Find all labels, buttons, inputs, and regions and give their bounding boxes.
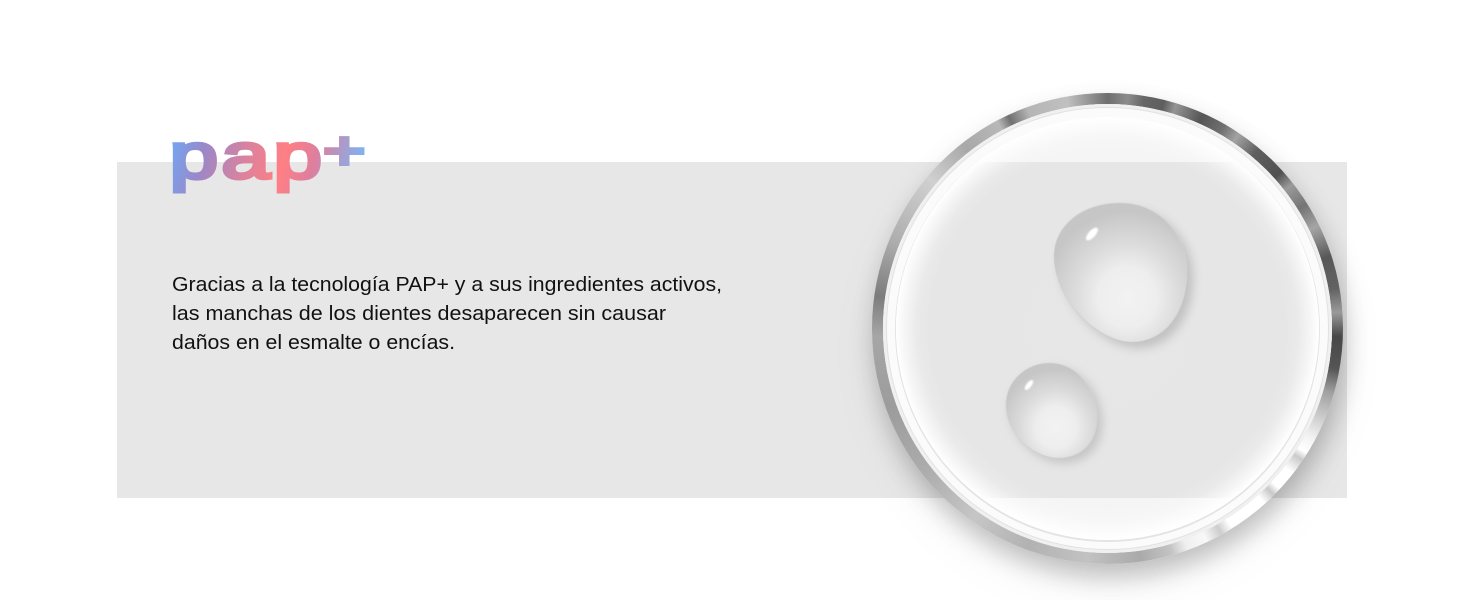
- panel: grey background band: [117, 162, 1347, 498]
- dish metallic rim: [872, 93, 1343, 564]
- dish inner well: [896, 117, 1319, 540]
- small drop: [1006, 363, 1102, 463]
- dish glass lip: [883, 104, 1332, 553]
- petri dish: [872, 93, 1343, 564]
- large drop: [1054, 203, 1193, 348]
- logo: pap+: pap: [170, 121, 322, 192]
- text block: description: [172, 274, 722, 354]
- water drops: [1006, 202, 1197, 466]
- text block: description: daños en el esmalte o encías.: [172, 332, 455, 354]
- text block: description: las manchas de los dientes desaparecen sin causar: [172, 303, 666, 325]
- logo: pap+: +: [323, 122, 365, 180]
- text block: description: Gracias a la tecnología PAP+ y a sus ingredientes activos,: [172, 274, 722, 296]
